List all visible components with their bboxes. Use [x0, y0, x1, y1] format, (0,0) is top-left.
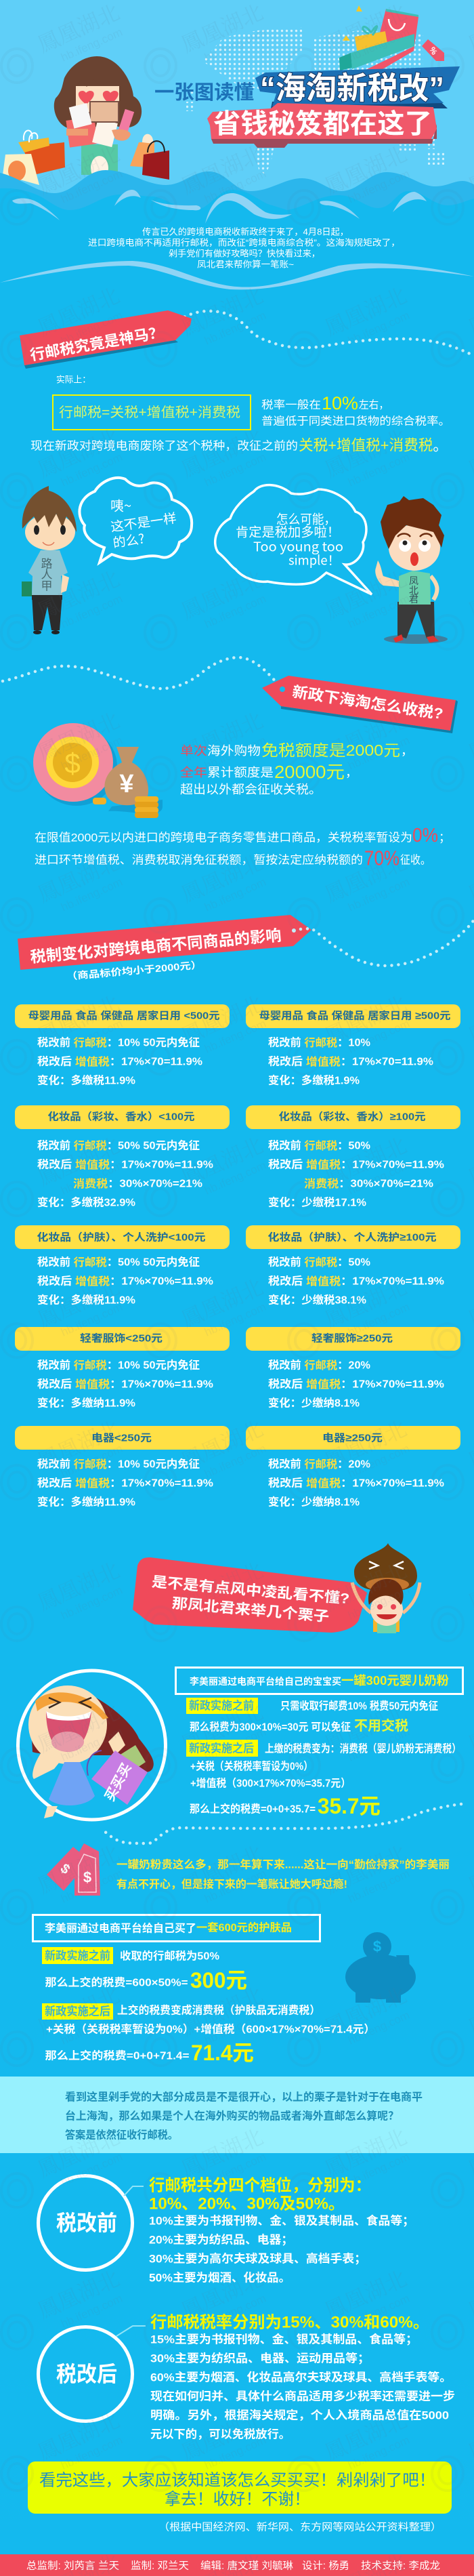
circle: after reform [38, 2326, 146, 2421]
label: after policy: 新政实施之后 [189, 1742, 254, 1755]
text: duty free limits [180, 741, 413, 796]
card: electronics over 250 [246, 1426, 460, 1509]
card: baby food over 500: 税改前 行邮税：10% [268, 1036, 370, 1049]
ribbon: what is postal tax [20, 310, 192, 369]
callout: examples bubble [133, 1557, 367, 1633]
speech bubble: left: 咦~ [110, 495, 131, 515]
callout: closing message: 拿去！收好！不谢！ [165, 2486, 310, 2509]
card: luxury apparel under 250 [15, 1327, 230, 1410]
example 2 heading box: 李美丽通过电商平台给自己买了 [45, 1922, 196, 1934]
example 2 heading box [33, 1915, 320, 1941]
text: duty free limits: 累计额度是 [207, 766, 274, 779]
title line one: 一张图读懂 [154, 81, 254, 104]
text: example 1 after: 那么上交的税费=0+0+35.7= [190, 1803, 316, 1815]
icon: piggy bank [345, 1932, 416, 2003]
text: example 2 after [45, 2003, 375, 2065]
text: example 2 after: 那么上交的税费=0+0+71.4= [45, 2049, 190, 2062]
panel: personal overseas purchases [0, 2077, 474, 2153]
text: yellow comment: 有点不开心，但是接下来的一笔账让她大呼过瘾! [116, 1877, 347, 1891]
character: passerby: 路 [41, 557, 53, 571]
footer credits: 总监制: 刘芮言 兰天 [26, 2560, 119, 2571]
text: tariff paragraph: 征收。 [400, 854, 431, 866]
icon: price tags: $ [83, 1869, 91, 1885]
speech bubble: left: 的么? [112, 529, 146, 552]
example 2 heading box: 一套600元的护肤品 [196, 1922, 292, 1934]
girl with shopping boxes [54, 56, 142, 180]
character: fengbeijun: 君 [409, 594, 418, 605]
dotted line four [103, 1804, 461, 1843]
text: tax rate: 普遍低于同类进口货物的综合税率。 [261, 415, 450, 427]
text: after reform rates [150, 2314, 455, 2441]
character: chestnut on head [352, 1543, 420, 1633]
card: makeup under 100 [15, 1105, 230, 1209]
ribbon: impact on goods [18, 915, 311, 970]
ribbon: how is tax charged [262, 676, 458, 733]
text: example 1 before: 那么税费为300×10%=30元 可以免征 [190, 1720, 351, 1734]
footer credits [0, 2554, 474, 2576]
card: baby food under 500: 税改后 增值税：17%×70=11.9% [37, 1056, 202, 1068]
card: baby food over 500: 变化：多缴税1.9% [268, 1074, 360, 1087]
text: before reform rates: 20%主要为纺织品、电器； [149, 2232, 293, 2246]
card: makeup under 100: 化妆品（彩妆、香水）<100元 [47, 1110, 195, 1122]
text: before reform rates: 10%、20%、30%及50%。 [149, 2194, 345, 2213]
text: duty free limits: ， [401, 744, 413, 758]
text: yellow comment: 一罐奶粉贵这么多，那一年算下来......这让一向“勤俭持家”的李美丽 [116, 1858, 450, 1870]
speech bubble: right: simple！ [288, 550, 340, 569]
text: example 1 after: 35.7元 [318, 1794, 381, 1818]
dotted line two [3, 657, 282, 689]
callout: closing message [28, 2461, 452, 2514]
text: example 2 after: 71.4元 [191, 2041, 254, 2065]
icon: shopping bag and gift top right: % [427, 45, 439, 56]
panel: personal overseas purchases: 答案是依然征收行邮税。 [65, 2128, 178, 2142]
card: electronics over 250: 税改前 行邮税：20% [268, 1457, 370, 1471]
footer credits: 设计: 杨勇 [302, 2560, 349, 2571]
text: tariff paragraph: ； [439, 831, 450, 844]
note: goods under 2000: （商品标价均小于2000元） [66, 959, 202, 982]
card: makeup under 100: 变化：多缴税32.9% [37, 1195, 135, 1209]
text: example 1 after: +关税（关税税率暂设为0%） [190, 1759, 313, 1773]
speech bubble: right: 怎么可能， [276, 510, 336, 527]
ribbon: what is postal tax: 行邮税究竟是神马？ [28, 323, 165, 364]
card: baby food over 500: 税改后 增值税：17%×70=11.9% [268, 1056, 433, 1068]
character: passerby [22, 486, 77, 634]
text: example 2 before [45, 1950, 247, 1992]
card: electronics under 250: 税改前 行邮税：10% 50元内免征 [37, 1457, 200, 1471]
text: after reform rates: 元以下的，可以免税放行。 [150, 2428, 290, 2441]
card: skincare over 100 [246, 1225, 460, 1307]
text: before reform rates: 50%主要为烟酒、化妆品。 [149, 2270, 290, 2284]
text: tax rate: 10% [322, 393, 358, 413]
text: example 1 before: 不用交税 [354, 1717, 408, 1734]
card: makeup under 100: 税改后 增值税：17%×70%=11.9% [37, 1159, 213, 1171]
source note: （根据中国经济网、新华网、东方网等网站公开资料整理） [158, 2521, 441, 2533]
card: baby food over 500: 母婴用品 食品 保健品 居家日用 ≥500元 [259, 1010, 451, 1022]
text: example 2 before: 那么上交的税费=600×50%= [45, 1976, 188, 1988]
card: luxury apparel under 250: 税改前 行邮税：10% 50元内免征 [37, 1358, 200, 1372]
icon: price tags [47, 1843, 100, 1896]
card: electronics over 250: 税改后 增值税：17%×70%=11.9% [268, 1477, 444, 1490]
card: luxury apparel over 250 [246, 1327, 460, 1410]
circle: after reform: 税改后 [56, 2362, 117, 2386]
card: skincare over 100: 化妆品（护肤）、个人洗护≥100元 [268, 1231, 436, 1243]
text: before reform rates: 30%主要为高尔夫球及球具、高档手表； [149, 2251, 366, 2265]
card: skincare under 100: 变化：多缴税11.9% [37, 1293, 135, 1307]
card: electronics under 250: 变化：多缴纳11.9% [37, 1495, 135, 1509]
text: new policy [30, 436, 448, 454]
panel: personal overseas purchases: 台上海淘，那么如果是个人在海外购买的物品或者海外直邮怎么算呢？ [65, 2109, 399, 2123]
card: luxury apparel over 250: 变化：少缴纳8.1% [268, 1396, 360, 1410]
panel: personal overseas purchases: 看到这里剁手党的大部分成员是不是很开心，以上的栗子是针对于在电商平 [65, 2090, 423, 2104]
card: skincare over 100: 税改后 增值税：17%×70%=11.9% [268, 1275, 444, 1288]
character: laughing girl in oval [18, 1671, 165, 1820]
label: after policy: 新政实施之后 [45, 2005, 110, 2018]
card: electronics under 250 [15, 1426, 230, 1509]
card: baby food under 500 [15, 1004, 230, 1087]
swoosh highlights [0, 190, 474, 289]
text: after reform rates: 60%主要为烟酒、化妆品高尔夫球及球具、高档手表等。 [150, 2371, 452, 2384]
text: duty free limits: 超出以外都会征收关税。 [180, 783, 322, 796]
intro text: 剁手党们有做好攻略吗？快快看过来， [169, 248, 320, 259]
card: electronics under 250: 电器<250元 [91, 1433, 152, 1444]
card: skincare under 100: 税改后 增值税：17%×70%=11.9% [37, 1275, 213, 1288]
bags right [130, 134, 169, 180]
text: example 2 before: 300元 [190, 1968, 247, 1992]
card: makeup under 100: 消费税：30%×70%=21% [73, 1178, 202, 1190]
text: example 1 after: +增值税（300×17%×70%=35.7元） [190, 1777, 351, 1789]
text: tariff paragraph: 0% [412, 825, 438, 846]
card: makeup over 100: 变化：少缴税17.1% [268, 1195, 366, 1209]
character: fengbeijun: 凤 [409, 575, 418, 586]
card: electronics under 250: 税改后 增值税：17%×70%=11.9% [37, 1477, 213, 1490]
footer credits: 监制: 邓兰天 [131, 2560, 189, 2571]
text: after reform rates: 行邮税税率分别为15%、30%和60%。 [150, 2314, 429, 2331]
footer credits: 技术支持: 李成龙 [361, 2560, 440, 2571]
card: makeup over 100: 税改前 行邮税：50% [268, 1139, 370, 1152]
text: before reform rates: 行邮税共分四个档位，分别为： [149, 2175, 371, 2194]
intro text: 进口跨境电商不再适用行邮税，而改征“跨境电商综合税”。这海淘规矩改了， [88, 237, 400, 248]
bags left [3, 130, 65, 185]
card: makeup over 100: 消费税：30%×70%=21% [304, 1178, 433, 1190]
icon: price tags: $ [58, 1861, 72, 1877]
intro text: 传言已久的跨境电商税收新政终于来了，4月8日起， [142, 226, 349, 237]
character: passerby: 甲 [41, 580, 53, 592]
card: electronics over 250: 电器≥250元 [322, 1433, 383, 1444]
text: after reform rates: 30%主要为纺织品、电器、运动用品等； [150, 2352, 370, 2365]
icon: shopping bag and gift top right [339, 5, 444, 71]
card: baby food under 500: 母婴用品 食品 保健品 居家日用 <500元 [28, 1010, 219, 1022]
text: tariff paragraph [35, 825, 450, 870]
card: baby food under 500: 税改前 行邮税：10% 50元内免征 [37, 1036, 200, 1049]
text: duty free limits: 全年 [180, 766, 207, 779]
text: tax rate: 左右， [359, 398, 389, 411]
card: luxury apparel under 250: 税改后 增值税：17%×70%=11.9% [37, 1378, 213, 1391]
footer credits: 编辑: 唐文瑾 刘毓琳 [200, 2560, 293, 2571]
character: fengbeijun: 北 [409, 585, 418, 596]
speech bubble: left: 这不是一样 [110, 508, 177, 535]
icon: piggy bank: $ [373, 1938, 381, 1955]
card: luxury apparel under 250: 轻奢服饰<250元 [80, 1332, 163, 1345]
speech bubble: right: 肯定是税加多啦！ [236, 522, 340, 541]
card: skincare over 100: 变化：少缴税38.1% [268, 1293, 366, 1307]
icon: coin and money bag [33, 723, 163, 818]
text: example 2 after: 上交的税费变成消费税（护肤品无消费税） [117, 2003, 320, 2017]
title banner pink: 省钱秘笈都在这了 [213, 109, 432, 139]
card: makeup over 100: 化妆品（彩妆、香水）≥100元 [279, 1110, 425, 1122]
card: skincare under 100: 税改前 行邮税：50% 50元内免征 [37, 1255, 200, 1269]
character: passerby: 人 [41, 568, 53, 581]
callout: examples bubble: 那凤北君来举几个栗子 [171, 1595, 330, 1625]
dotted line one [173, 311, 474, 356]
card: luxury apparel over 250: 税改后 增值税：17%×70%=11.9% [268, 1378, 444, 1391]
icon: heart eyes [79, 91, 94, 104]
speech bubble: left [79, 478, 192, 563]
card: luxury apparel under 250: 变化：多缴纳11.9% [37, 1396, 135, 1410]
icon: coin and money bag: ¥ [119, 770, 134, 798]
card: luxury apparel over 250: 轻奢服饰≥250元 [311, 1332, 393, 1345]
card: baby food under 500: 变化：多缴税11.9% [37, 1074, 135, 1087]
text: before reform rates [149, 2175, 414, 2284]
ribbon: impact on goods: 税制变化对跨境电商不同商品的影响 [30, 926, 282, 966]
card: makeup over 100: 税改后 增值税：17%×70%=11.9% [268, 1159, 444, 1171]
card: skincare over 100: 税改前 行邮税：50% [268, 1255, 370, 1269]
example 1 heading box: 一罐300元婴儿奶粉 [341, 1674, 449, 1688]
text: example 2 before: 收取的行邮税为50% [120, 1950, 219, 1963]
label: before policy: 新政实施之前 [189, 1698, 254, 1712]
card: luxury apparel over 250: 税改前 行邮税：20% [268, 1358, 370, 1372]
formula box: 行邮税=关税+增值税+消费税 [59, 405, 240, 420]
speech bubble: right [215, 485, 372, 594]
title banner pink [207, 103, 437, 148]
card: skincare under 100 [15, 1225, 230, 1307]
text: after reform rates: 明确。另外，根据海关规定，个人入境商品总值在5000 [150, 2409, 449, 2422]
example 1 heading box: 李美丽通过电商平台给自己的宝宝买 [190, 1676, 341, 1687]
card: skincare under 100: 化妆品（护肤）、个人洗护<100元 [37, 1231, 206, 1243]
card: makeup under 100: 税改前 行邮税：50% 50元内免征 [37, 1139, 200, 1152]
text: new policy: 关税+增值税+消费税。 [299, 436, 448, 454]
text: duty free limits: 免税额度是2000元 [261, 741, 400, 759]
callout: closing message: 看完这些，大家应该知道该怎么买买买！剁剁剁了吧！ [39, 2467, 435, 2490]
circle: before reform [38, 2175, 144, 2270]
text: tax rate: 税率一般在 [261, 398, 321, 411]
text: tariff paragraph: 70% [364, 846, 400, 870]
text: example 2 after: +关税（关税税率暂设为0%）+增值税（600×17%×70%=71.4元） [46, 2022, 375, 2036]
character: laughing girl in oval: 买买买 [102, 1761, 135, 1804]
waves [0, 170, 474, 339]
title banner blue: “海淘新税改” [260, 70, 444, 106]
card: electronics over 250: 变化：少缴纳8.1% [268, 1495, 360, 1509]
text: tariff paragraph: 在限值2000元以内进口的跨境电子商务零售进口商品，关税税率暂设为 [35, 831, 412, 844]
callout: examples bubble: 是不是有点风中凌乱看不懂? [151, 1574, 350, 1607]
text: tax rate [261, 393, 450, 427]
intro text: 凤北君来帮你算一笔账~ [197, 259, 294, 270]
hair [54, 56, 142, 129]
text: after reform rates: 现在如何归并、具体什么商品适用多少税率还需要进一步 [150, 2390, 455, 2403]
icon: coin and money bag: $ [64, 747, 81, 779]
text: example 1 before [190, 1700, 438, 1734]
header sky [0, 0, 474, 203]
text: before reform rates: 10%主要为书报刊物、金、银及其制品、食品等； [149, 2213, 414, 2227]
formula box [53, 395, 251, 430]
text: duty free limits: 海外购物 [207, 744, 261, 758]
dotted line three [301, 920, 474, 966]
card: baby food over 500 [246, 1004, 460, 1087]
dotted world map [186, 27, 444, 175]
text: after reform rates: 15%主要为书报刊物、金、银及其制品、食品等； [150, 2333, 418, 2346]
text: yellow comment [116, 1858, 450, 1891]
text: example 1 before: 只需收取行邮费10% 税费50元内免征 [280, 1700, 438, 1712]
text: duty free limits: 单次 [180, 744, 207, 758]
text: tariff paragraph: 进口环节增值税、消费税取消免征税额，暂按法定应纳税额的 [35, 854, 363, 866]
character: fengbeijun [375, 496, 448, 644]
speech bubble: right: Too young too [253, 537, 343, 556]
label: before policy: 新政实施之前 [45, 1949, 110, 1963]
card: makeup over 100 [246, 1105, 460, 1209]
ribbon: how is tax charged: 新政下海淘怎么收税? [291, 683, 444, 722]
text: actually: 实际上： [56, 374, 91, 385]
text: duty free limits: 20000元 [274, 762, 345, 782]
intro text [88, 226, 400, 270]
text: example 1 after [190, 1742, 461, 1818]
circle: before reform: 税改前 [56, 2211, 117, 2235]
example 1 heading box [176, 1667, 463, 1694]
text: duty free limits: ， [345, 766, 358, 779]
text: new policy: 现在新政对跨境电商废除了这个税种，改征之前的 [30, 439, 298, 453]
